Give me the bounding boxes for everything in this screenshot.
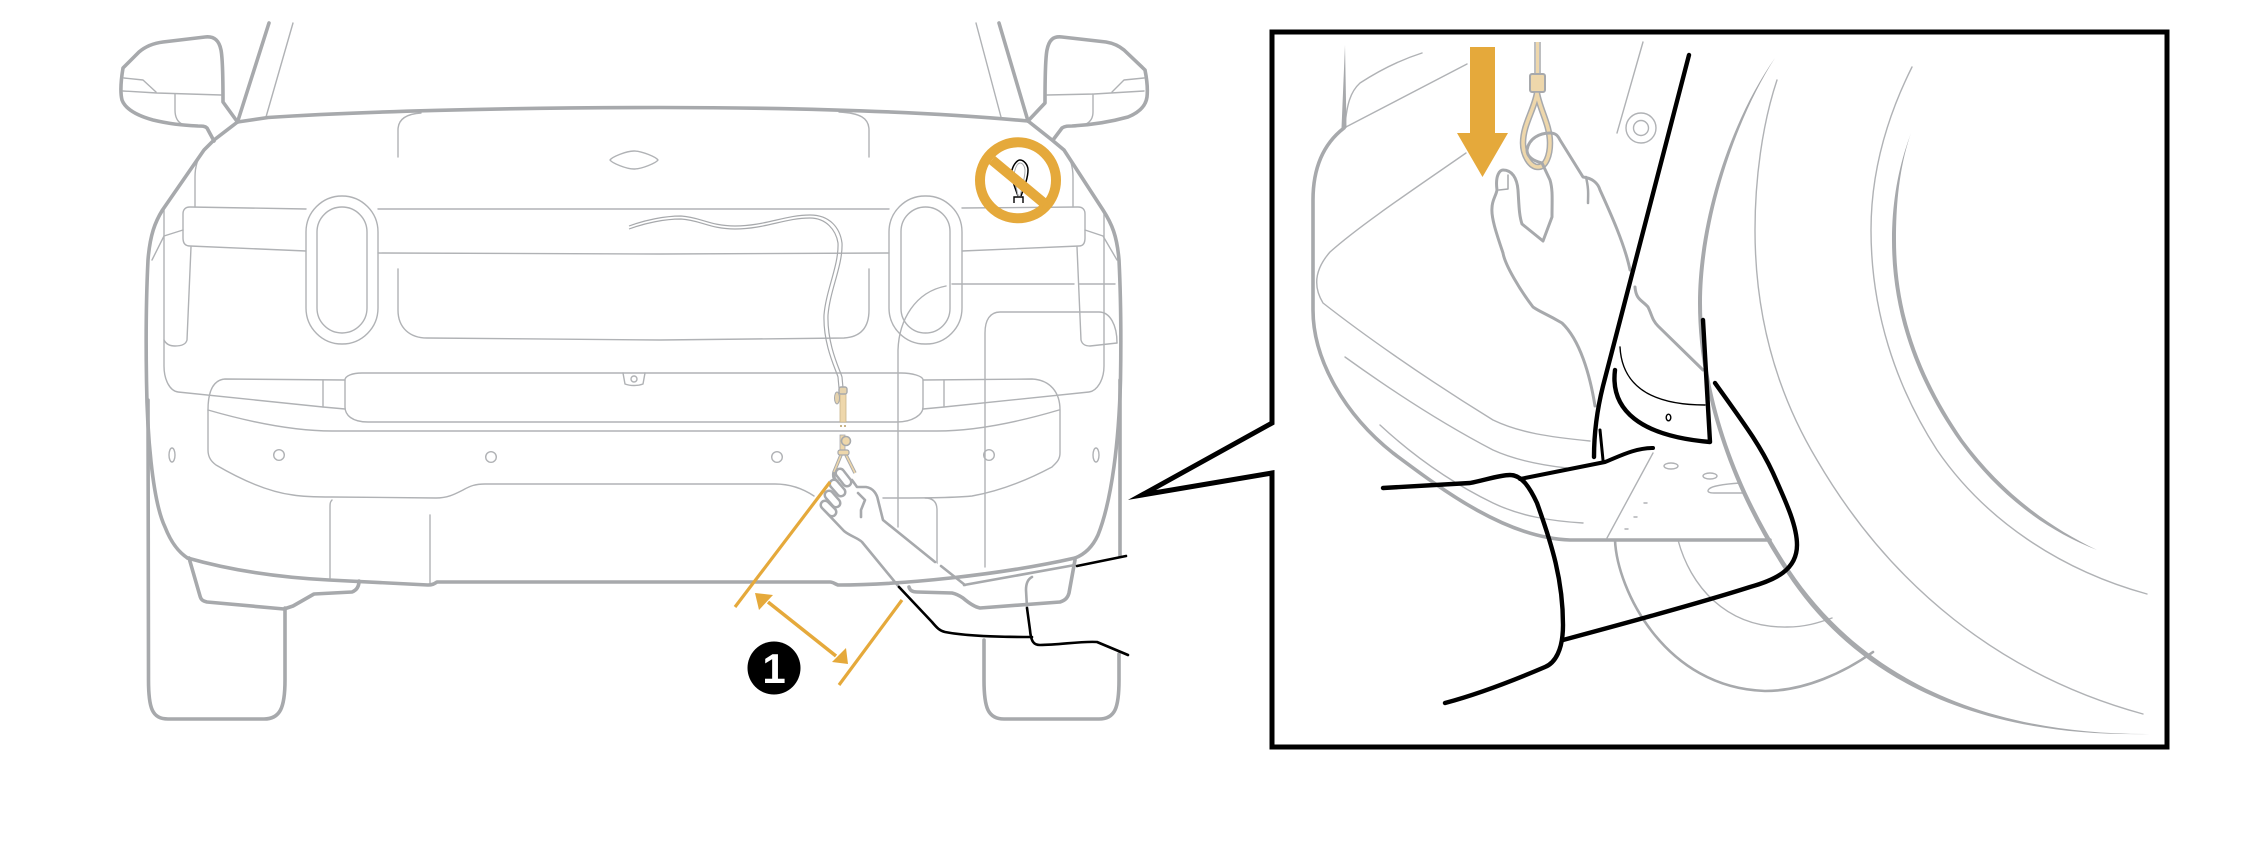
right mirror outline bbox=[1028, 37, 1147, 140]
right mud flap bbox=[909, 560, 1075, 608]
hood panel and badge details bbox=[195, 23, 1073, 207]
right headlight ring bbox=[889, 196, 962, 344]
callout panel: close-up of pull direction bbox=[1142, 32, 2167, 747]
tow strap loop bbox=[1523, 42, 1550, 167]
bumper outline bbox=[1313, 128, 1770, 540]
left mirror detail bbox=[123, 78, 221, 124]
prohibited strap location icon bbox=[980, 142, 1056, 218]
right corner panels bbox=[923, 210, 1117, 409]
bumper top spike bbox=[1342, 45, 1346, 128]
upper grille panel bbox=[398, 269, 869, 340]
sensors bbox=[169, 373, 1099, 462]
callout frame bbox=[1142, 32, 2167, 747]
inner wheel arch details bbox=[1607, 453, 1832, 627]
right mirror detail bbox=[1047, 78, 1144, 124]
step number badge: 1 bbox=[762, 645, 786, 692]
vehicle front view bbox=[121, 23, 1147, 719]
hand pulling strap bbox=[1492, 133, 1703, 406]
tire tread arc one bbox=[1755, 80, 2143, 714]
tire tread arc three bbox=[1892, 133, 2097, 550]
left wheel bbox=[148, 400, 285, 719]
left mud flap bbox=[189, 558, 359, 609]
tire outer sweep bbox=[1698, 58, 2150, 734]
lower wheel arc bbox=[1615, 540, 1873, 691]
body outline bbox=[146, 23, 1121, 585]
glove and sleeve outline bbox=[1383, 55, 1797, 703]
bumper contour lines bbox=[1317, 42, 1656, 523]
sleeve outline bbox=[899, 556, 1128, 655]
left headlight ring bbox=[306, 196, 378, 344]
step number badge bbox=[748, 642, 800, 694]
measurement guide lines bbox=[735, 482, 902, 685]
tire tread arc two bbox=[1871, 67, 2147, 594]
lower bumper bbox=[208, 373, 1060, 583]
see-through wheel panel lines bbox=[898, 284, 1117, 567]
stowed tow cable bbox=[629, 215, 843, 388]
left mirror outline bbox=[121, 37, 238, 141]
distance arrow bbox=[755, 593, 848, 664]
light bar bbox=[183, 207, 1085, 254]
left corner panels bbox=[152, 208, 345, 409]
tow strap on vehicle bbox=[834, 387, 855, 482]
hand gripping strap bbox=[824, 473, 965, 587]
right wheel bbox=[984, 640, 1119, 719]
pull direction arrow bbox=[1457, 47, 1508, 177]
